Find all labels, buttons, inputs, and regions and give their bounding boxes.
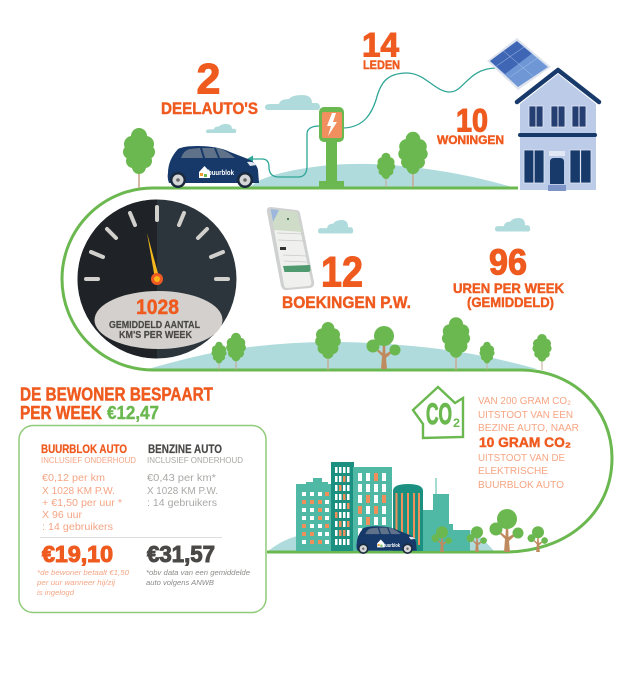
- heading: savings: €12,47: [107, 403, 159, 423]
- icon: car: buurblok: [208, 168, 235, 177]
- icon: house: [517, 70, 599, 191]
- trees: top scene: [123, 128, 428, 188]
- stat: 96 uren per week: 96: [489, 242, 527, 282]
- heading: savings: DE BEWONER BESPAART: [20, 384, 213, 404]
- gauge: [78, 200, 236, 358]
- icon: phone: [267, 207, 314, 290]
- heading: savings: [20, 384, 213, 423]
- column: benzine auto: auto volgens ANWB: [146, 578, 214, 587]
- text block: CO2 reduction: ELEKTRISCHE: [478, 465, 548, 477]
- trees: middle scene: [211, 317, 552, 370]
- column: buurblok auto: X 1028 KM P.W.: [42, 485, 115, 497]
- icon: CO2 arrow: CO: [426, 398, 452, 431]
- icon: charging station: [319, 107, 344, 188]
- text block: CO2 reduction: UITSTOOT VAN DE: [478, 452, 565, 464]
- column: benzine auto: [146, 444, 250, 587]
- column: benzine auto: : 14 gebruikers: [147, 497, 217, 509]
- text block: CO2 reduction: 10 GRAM CO₂: [479, 434, 571, 450]
- cloud: top large: [265, 95, 320, 110]
- column: benzine auto: INCLUSIEF ONDERHOUD: [147, 455, 243, 465]
- column: buurblok auto: + €1,50 per uur *: [42, 497, 122, 509]
- gauge needle: [147, 233, 163, 285]
- cloud: top small: [206, 124, 236, 133]
- icon: CO2 arrow: [413, 387, 463, 438]
- gauge: 1028: [136, 296, 179, 319]
- green route line: [62, 188, 612, 552]
- icon: car in city: buurblok: [383, 543, 400, 549]
- text block: CO2 reduction: BEZINE AUTO, NAAR: [478, 422, 579, 434]
- stat: 10 woningen: [437, 102, 504, 147]
- stat: 2 deelauto's: 2: [197, 56, 220, 104]
- icon: car: [168, 146, 259, 188]
- icon: CO2 arrow: 2: [453, 416, 460, 430]
- gauge: GEMIDDELD AANTAL: [109, 320, 200, 331]
- text block: CO2 reduction: VAN 200 GRAM CO₂: [478, 395, 571, 407]
- stat: 14 leden: 14: [362, 26, 399, 64]
- column: buurblok auto: is ingelogd: [37, 588, 75, 597]
- background hill: city scene: [268, 530, 494, 551]
- stat: 2 deelauto's: DEELAUTO'S: [161, 100, 258, 118]
- text block: CO2 reduction: UITSTOOT VAN EEN: [478, 409, 573, 421]
- stat: 12 boekingen: [282, 248, 411, 312]
- icon: solar panel: [487, 38, 551, 90]
- stat: 96 uren per week: (GEMIDDELD): [467, 294, 554, 310]
- stat: 96 uren per week: [453, 242, 564, 310]
- column: buurblok auto: : 14 gebruikers: [42, 521, 113, 533]
- column: buurblok auto: €0,12 per km: [42, 472, 105, 484]
- stat: 96 uren per week: UREN PER WEEK: [453, 280, 564, 296]
- column: benzine auto: €0,43 per km*: [147, 472, 216, 484]
- background hill: top scene: [250, 164, 512, 187]
- background hill: middle scene: [148, 342, 537, 369]
- column: benzine auto: €31,57: [147, 541, 215, 567]
- stat: 2 deelauto's: [161, 56, 258, 118]
- heading: savings: PER WEEK: [20, 403, 102, 423]
- cloud: middle left: [318, 220, 353, 234]
- text block: CO2 reduction: [478, 395, 579, 491]
- column: buurblok auto: *de bewoner betaalt €1,50: [37, 568, 130, 577]
- stat: 12 boekingen: BOEKINGEN P.W.: [282, 294, 411, 312]
- column: buurblok auto: [36, 444, 136, 597]
- column: buurblok auto: BUURBLOK AUTO: [41, 444, 127, 456]
- column: buurblok auto: €19,10: [42, 541, 113, 567]
- stat: 12 boekingen: 12: [321, 248, 363, 296]
- stat: 14 leden: LEDEN: [363, 58, 400, 72]
- city skyline: [296, 462, 470, 551]
- column: benzine auto: *obv data van een gemiddelde: [146, 568, 250, 577]
- column: buurblok auto: per uur wanneer hij/zij: [36, 578, 115, 587]
- column: benzine auto: BENZINE AUTO: [148, 444, 222, 456]
- icon: car in city: [356, 526, 417, 554]
- stat: 10 woningen: WONINGEN: [437, 135, 504, 147]
- column: buurblok auto: INCLUSIEF ONDERHOUD: [41, 455, 136, 465]
- column: benzine auto: X 1028 KM P.W.: [147, 485, 218, 497]
- cloud: middle right: [495, 218, 530, 232]
- charging cables: [250, 68, 497, 177]
- gauge: KM'S PER WEEK: [119, 330, 193, 341]
- column: buurblok auto: X 96 uur: [42, 509, 82, 521]
- stat: 10 woningen: 10: [456, 102, 488, 138]
- text block: CO2 reduction: BUURBLOK AUTO: [478, 479, 564, 491]
- arrow: cable to car: [247, 156, 253, 162]
- panel: cost comparison: [19, 426, 266, 612]
- trees: city scene: [432, 509, 548, 552]
